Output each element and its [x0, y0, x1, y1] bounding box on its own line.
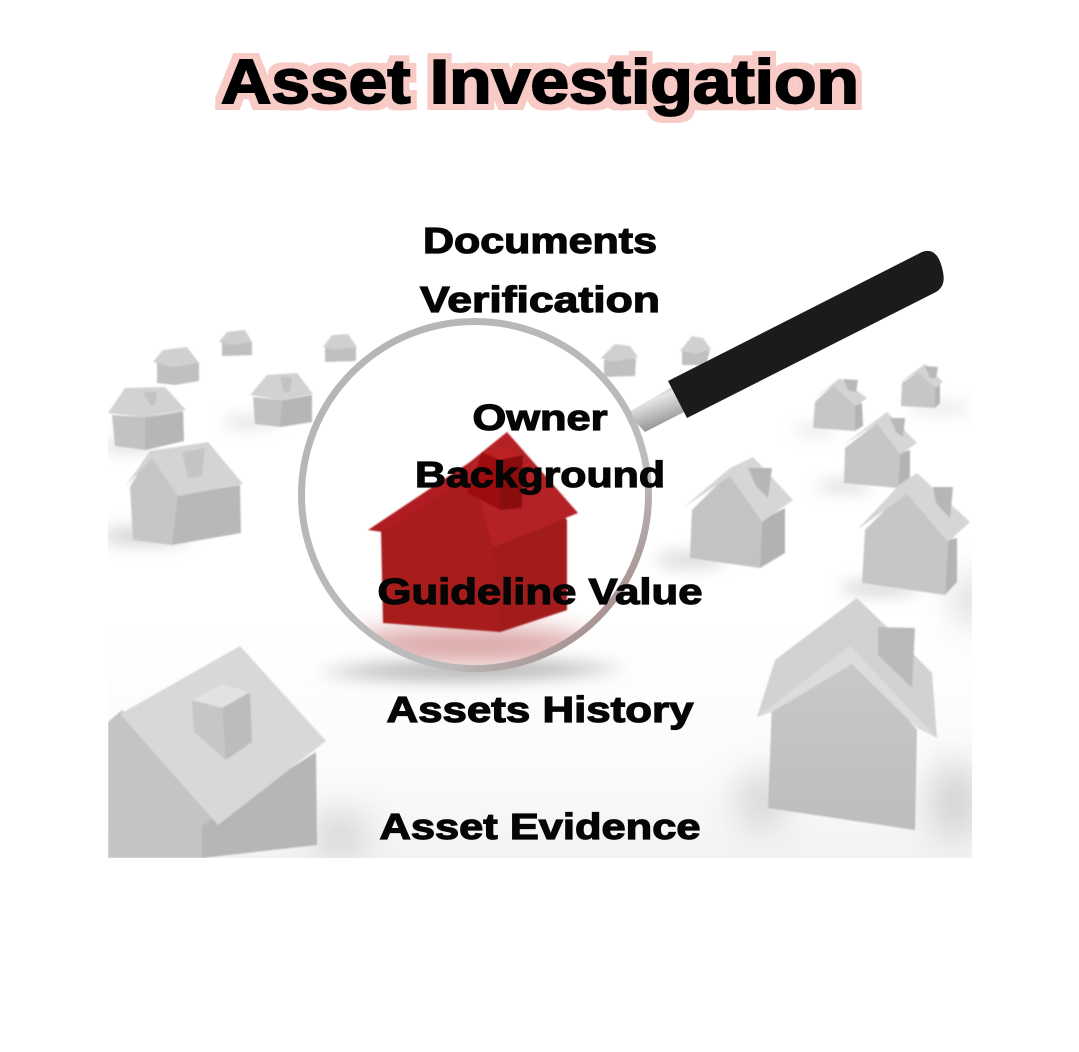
- magnifying glass lens: [301, 321, 649, 669]
- house: far right small 2: [680, 336, 711, 365]
- ground shadows: [100, 405, 972, 595]
- text: Documents Verification: Verification: [420, 279, 660, 320]
- house: left row 2: [108, 387, 186, 450]
- house: left centre: [250, 373, 313, 427]
- house: right back 1: [811, 378, 867, 431]
- house: right middle: [840, 412, 917, 488]
- house: far left 2: [153, 347, 199, 385]
- large house shadows: [315, 575, 995, 857]
- house: far left 1: [219, 330, 252, 356]
- text: Owner Background: Owner: [472, 397, 608, 438]
- house: centre right: [683, 457, 793, 568]
- illustration: houses and magnifying glass: [100, 250, 995, 858]
- title: Asset Investigation: [221, 48, 859, 117]
- house: left large: [125, 442, 243, 545]
- text: Assets History: Assets History: [386, 689, 694, 730]
- ground: [208, 814, 972, 858]
- icon: red house: [368, 432, 578, 632]
- house: bottom right: [757, 598, 937, 830]
- text: Documents Verification: Documents: [423, 220, 657, 261]
- text: Owner Background: [415, 397, 665, 495]
- house: right large: [857, 473, 970, 595]
- house: far centre left: [323, 334, 357, 362]
- text: Documents Verification: [420, 220, 660, 320]
- house: far right small centre: [601, 344, 638, 377]
- lens shadow on ground: [318, 660, 625, 681]
- text: Owner Background: Background: [415, 454, 665, 495]
- text: Asset Evidence: Asset Evidence: [380, 806, 700, 847]
- magnifying glass handle: [627, 251, 944, 432]
- house: right back 2: [899, 364, 943, 408]
- house: bottom left: [108, 646, 326, 858]
- text: Guideline Value: Guideline Value: [378, 571, 702, 612]
- red glow: [345, 627, 595, 663]
